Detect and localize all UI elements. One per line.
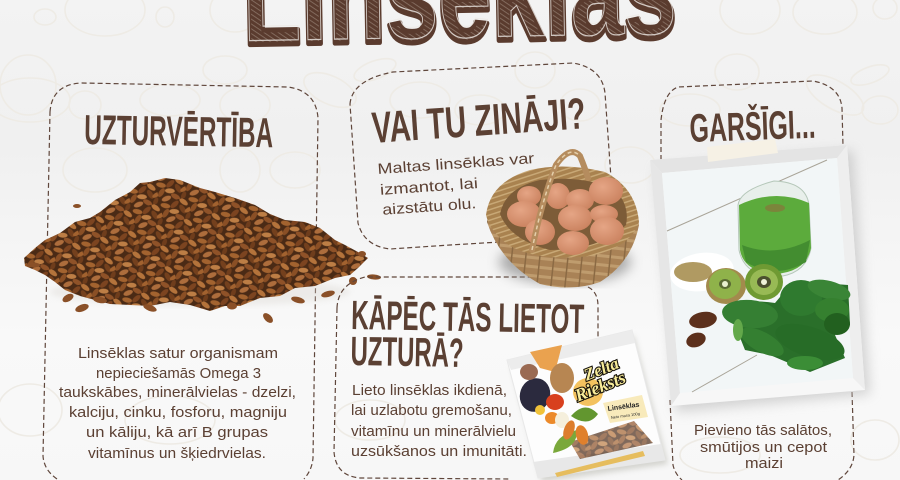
seed plate	[668, 249, 736, 295]
body text: eggs	[377, 150, 538, 219]
heading: UZTURVĒRTĪBA: UZTURVĒRTĪBA	[84, 106, 274, 156]
illustration: egg basket	[486, 152, 639, 288]
panel outline	[43, 83, 318, 479]
package shadow	[511, 336, 668, 480]
body text: nutrition: taukskābes, minerālvielas - dzelzi,	[59, 384, 296, 401]
photo frame	[650, 145, 865, 406]
brand logo: Zelta Rieksts: Rieksts	[571, 367, 628, 406]
washi tape	[707, 139, 778, 162]
body text: eggs: Maltas linsēklas var	[377, 150, 535, 178]
body text: usage: Lieto linsēklas ikdienā,	[352, 382, 507, 399]
flaxseed pile	[24, 178, 381, 325]
basket body	[487, 170, 639, 288]
body text: serving	[694, 422, 832, 472]
spinach leaves	[721, 276, 853, 372]
body text: usage	[351, 382, 527, 460]
kiwi halves	[706, 264, 783, 304]
yellow label: Linsēklas	[607, 402, 640, 413]
brand logo: Zelta Rieksts: Zelta	[580, 353, 622, 385]
package top strip	[507, 330, 635, 370]
photo image	[662, 158, 853, 393]
basket handle	[532, 152, 588, 250]
body text: serving: maizi	[745, 455, 783, 472]
body text: eggs: aizstātu olu.	[382, 195, 477, 219]
fruit art	[515, 345, 603, 453]
body text: usage: uzsūkšanos un imunitāti.	[351, 443, 527, 460]
body text: nutrition: un kāliju, kā arī B grupas	[86, 424, 268, 441]
photo shadow	[656, 150, 870, 412]
eggs	[507, 177, 624, 255]
gold line	[555, 451, 645, 477]
body text: serving: Pievieno tās salātos,	[694, 422, 832, 439]
smoothie glass	[738, 181, 811, 277]
yellow label	[603, 395, 648, 423]
seed window	[570, 421, 653, 459]
panel: why use	[334, 277, 598, 479]
body text: nutrition: Linsēklas satur organismam	[78, 345, 278, 362]
dates	[684, 310, 718, 350]
body text: eggs: izmantot, lai	[379, 175, 478, 199]
heading: KĀPĒC TĀS LIETOT UZTURĀ?: KĀPĒC TĀS LIETOT	[351, 292, 585, 342]
panel: nutrition value	[24, 83, 381, 479]
package bottom strip	[533, 444, 665, 478]
panel outline	[661, 81, 854, 480]
heading: KĀPĒC TĀS LIETOT UZTURĀ?: UZTURĀ?	[350, 328, 464, 376]
body text: nutrition: kalciju, cinku, fosforu, magniju	[69, 404, 287, 421]
body text: serving: smūtijos un cepot	[700, 439, 828, 456]
body text: usage: lai uzlabotu gremošanu,	[351, 402, 512, 419]
panel outline	[350, 63, 611, 249]
heading: VAI TU ZINĀJI?: VAI TU ZINĀJI?	[370, 89, 587, 153]
yellow label: Neto masa 100g	[610, 411, 640, 420]
body text: nutrition: nepieciešamās Omega 3	[96, 365, 261, 382]
table plank lines	[667, 160, 827, 392]
product package: Zelta Rieksts	[507, 330, 668, 480]
package body	[507, 330, 665, 478]
heading: KĀPĒC TĀS LIETOT UZTURĀ?	[350, 292, 585, 378]
heading: GARŠĪGI...: GARŠĪGI...	[689, 101, 816, 151]
panel outline	[334, 277, 598, 479]
panel: tasty	[661, 81, 854, 480]
body text: nutrition	[59, 345, 296, 462]
panel: did you know	[350, 63, 611, 249]
body text: nutrition: vitamīnus un šķiedrvielas.	[88, 445, 266, 462]
brand logo: Zelta Rieksts	[565, 353, 628, 406]
basket rim	[486, 166, 639, 258]
body text: usage: vitamīnu un minerālvielu	[351, 423, 516, 440]
basket interior	[500, 179, 627, 250]
polaroid photo	[650, 145, 870, 412]
basket shadow	[499, 240, 631, 284]
